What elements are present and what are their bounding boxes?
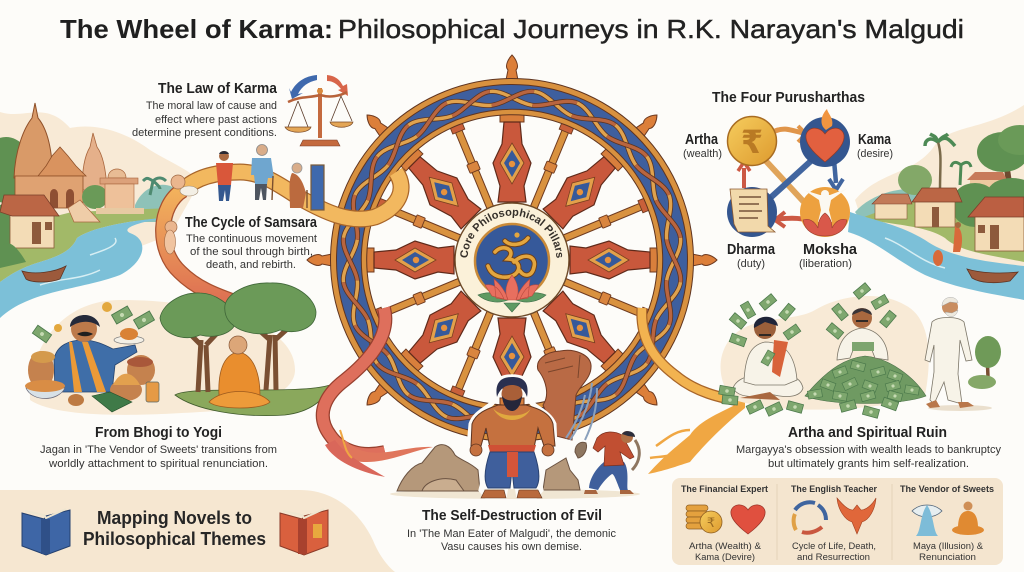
labels: [683, 131, 893, 270]
text: the law of karma: The moral law of cause and: [146, 100, 277, 112]
title: [60, 14, 964, 44]
heading: The Four Purusharthas: [712, 89, 865, 106]
wheel spokes: [366, 114, 658, 406]
icon: om symbol: [488, 232, 534, 277]
icon: blue book: [22, 509, 70, 555]
column: the english teacher: Cycle of Life, Death,: [792, 541, 876, 552]
column: the financial expert: [681, 484, 769, 563]
labels: Kama: [858, 131, 892, 148]
wheel rim with braid: [330, 78, 694, 442]
panel: four purusharthas: [683, 89, 893, 270]
illustration: village landscape with river: [848, 105, 1024, 300]
icon: meditating monk: [952, 502, 984, 535]
icon: infant: [164, 175, 198, 254]
illustration: artha and spiritual ruin: [719, 283, 1001, 418]
column: the vendor of sweets: The Vendor of Sweets: [900, 484, 994, 495]
icon: weeping eye: [912, 505, 942, 536]
connecting arrows: [738, 126, 843, 227]
figure: clenched fist: [537, 350, 597, 440]
text: the law of karma: [132, 80, 278, 139]
text: the cycle of samsara: death, and rebirth.: [206, 259, 296, 271]
labels: (desire): [857, 148, 893, 160]
title: The Wheel of Karma:: [60, 14, 333, 44]
wheel knobs: [307, 55, 717, 409]
icon: red book: [280, 509, 328, 555]
arrow: samsara cycle band: [163, 172, 401, 306]
text: from bhogi to yogi: From Bhogi to Yogi: [95, 424, 222, 441]
arrow: red karma stream: [323, 308, 433, 477]
column: the financial expert: Artha (Wealth) &: [689, 541, 762, 552]
labels: (liberation): [799, 258, 852, 270]
column: the english teacher: and Resurrection: [797, 552, 870, 563]
text: artha and spiritual ruin: Artha and Spiritual Ruin: [788, 424, 947, 441]
node: kama heart: [800, 109, 850, 167]
labels: (wealth): [683, 148, 722, 160]
panel: novel themes table: [672, 478, 1003, 565]
text: the cycle of samsara: [185, 214, 318, 271]
text: artha and spiritual ruin: [736, 424, 1001, 470]
illustration: life-stage figures: [216, 144, 324, 210]
figure: margayya on pile: [837, 308, 888, 360]
text: the law of karma: determine present conditions.: [132, 127, 277, 139]
text: the self-destruction of evil: [407, 507, 616, 553]
wheel hub: Core Philosophical Pillars: [460, 208, 562, 258]
node: artha coin: [728, 116, 776, 166]
figure: walking margayya: [925, 297, 1001, 411]
text: mapping heading: [83, 507, 266, 549]
icon: lotus: [478, 275, 546, 312]
text: from bhogi to yogi: worldly attachment to spiritual renunciation.: [48, 458, 268, 470]
labels: Moksha: [803, 241, 858, 258]
illustration: the self-destruction of evil: [390, 350, 640, 499]
text: the self-destruction of evil: Vasu causes his own demise.: [441, 541, 582, 553]
figure: seated man counting money: [733, 317, 803, 400]
text: from bhogi to yogi: [40, 424, 277, 470]
flying banknotes: [719, 283, 899, 418]
node: moksha lotus: [800, 187, 850, 237]
text: the cycle of samsara: The continuous movement: [186, 233, 317, 245]
figure: meditating monk: [209, 336, 270, 408]
icon: cycle arrows: [794, 502, 826, 533]
figure: jagan the sweet vendor: [25, 302, 159, 412]
column: the english teacher: [791, 484, 877, 563]
panel: mapping novels to philosophical themes: [0, 490, 395, 572]
title: Philosophical Journeys in R.K. Narayan's Malgudi: [338, 14, 964, 44]
column: the financial expert: The Financial Expert: [681, 484, 769, 495]
figure: demon vasu: [469, 377, 555, 498]
icon: balance scale with arrows: [285, 75, 353, 146]
text: the law of karma: The Law of Karma: [158, 80, 278, 97]
illustration: from bhogi to yogi: [25, 283, 330, 416]
node: dharma scroll: [727, 187, 777, 237]
column: the financial expert: Kama (Devire): [695, 552, 755, 563]
icon: phoenix: [837, 498, 876, 534]
text: the self-destruction of evil: In 'The Man Eater of Malgudi', the demonic: [407, 528, 616, 540]
text: artha and spiritual ruin: but ultimately grants him self-realization.: [768, 458, 969, 470]
text: artha and spiritual ruin: Margayya's obsession with wealth leads to bankruptcy: [736, 444, 1001, 456]
text: mapping heading: Mapping Novels to: [97, 507, 252, 528]
column: the vendor of sweets: Maya (Illusion) &: [913, 541, 984, 552]
icon: coins: ₹: [707, 516, 715, 531]
text: mapping heading: Philosophical Themes: [83, 528, 266, 549]
text: the cycle of samsara: of the soul through birth,: [190, 246, 313, 258]
text: from bhogi to yogi: Jagan in 'The Vendor of Sweets' transitions from: [40, 444, 277, 456]
node: artha coin: ₹: [741, 123, 763, 161]
labels: (duty): [737, 258, 765, 270]
wheel hub: [454, 202, 570, 318]
labels: Artha: [685, 131, 719, 148]
icon: heart: [731, 505, 765, 534]
column: the english teacher: The English Teacher: [791, 484, 877, 495]
rocks: [397, 442, 587, 491]
text: the self-destruction of evil: The Self-Destruction of Evil: [422, 507, 602, 524]
ground shadow: [390, 489, 640, 499]
figure: fleeing man: [584, 431, 639, 494]
arrow: golden wealth stream: [642, 308, 745, 474]
chart: wheel of karma: [284, 54, 754, 476]
column: the vendor of sweets: [900, 484, 994, 563]
trees: [160, 283, 316, 392]
labels: Dharma: [727, 241, 776, 258]
illustration: temple landscape with river: [0, 103, 200, 318]
text: the cycle of samsara: The Cycle of Samsara: [185, 214, 318, 231]
text: the law of karma: effect where past actions: [155, 114, 277, 126]
column: the vendor of sweets: Renunciation: [919, 552, 976, 563]
money pile: [805, 356, 926, 404]
